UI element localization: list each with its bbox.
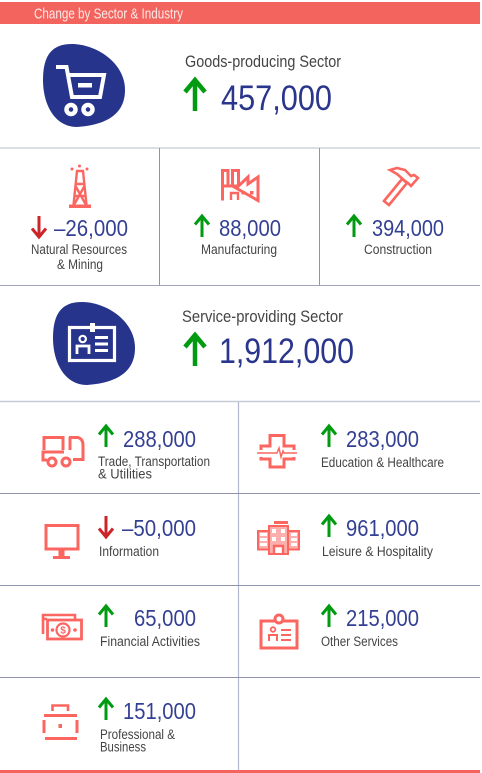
icon: briefcase: [44, 706, 77, 740]
heading: goods-producing sector: Goods-producing Sector: [185, 52, 341, 71]
icon: money: [43, 615, 82, 639]
value: 151,000: 151,000: [123, 698, 196, 724]
arrow: up: [195, 216, 209, 237]
icon: id card: [261, 615, 297, 648]
icon: money: $: [60, 626, 66, 636]
icon: shopping cart: [43, 44, 125, 127]
label: other services: Other Services: [321, 634, 398, 649]
panel: information: [46, 515, 196, 559]
label: manufacturing: Manufacturing: [201, 242, 277, 257]
arrow: up: [322, 606, 336, 627]
arrow: up: [322, 426, 336, 447]
header bar: [0, 2, 480, 24]
panel: education and healthcare: [257, 426, 444, 470]
panel: leisure and hospitality: [258, 515, 433, 559]
panel: financial activities: [43, 605, 200, 649]
arrow: down: [99, 516, 113, 537]
label: professional and business: [100, 727, 175, 754]
value: 457,000: 457,000: [221, 79, 332, 118]
icon: hammer: [384, 168, 418, 205]
panel: manufacturing: [195, 170, 281, 257]
arrow: up: [99, 426, 113, 447]
icon: monitor: [46, 526, 78, 559]
value: -26,000: –26,000: [54, 215, 128, 241]
bottom bar: [0, 770, 480, 773]
panel: other services: [261, 605, 419, 649]
value: 1,912,000: 1,912,000: [219, 332, 354, 371]
arrow: up: [185, 80, 205, 111]
arrow: up: [322, 516, 336, 537]
arrow: up: [347, 216, 361, 237]
panel: natural resources and mining: [31, 164, 128, 272]
panel: construction: [347, 168, 444, 257]
label: information: Information: [99, 544, 159, 559]
value: 88,000: 88,000: [219, 215, 281, 241]
label: trade, transportation and utilities: [98, 454, 210, 482]
panel: goods-producing sector: [43, 44, 341, 127]
label: trade, transportation and utilities: & Utilities: [98, 466, 152, 482]
value: 65,000: 65,000: [134, 605, 196, 631]
icon: factory: [222, 170, 258, 200]
arrow: down: [32, 216, 46, 237]
label: education and healthcare: Education & Healthcare: [321, 455, 444, 470]
label: natural resources and mining: [31, 242, 127, 272]
label: natural resources and mining: Natural Resources: [31, 242, 127, 257]
label: trade, transportation and utilities: Trade, Transportation: [98, 454, 210, 469]
header title: Change by Sector & Industry: [34, 6, 184, 22]
value: 288,000: 288,000: [123, 426, 196, 452]
value: 283,000: 283,000: [346, 426, 419, 452]
panel: service-providing sector: [53, 302, 354, 385]
label: professional and business: Business: [100, 740, 146, 754]
icon: oil derrick: [69, 164, 91, 208]
panel: trade, transportation and utilities: [42, 426, 210, 482]
value: 215,000: 215,000: [346, 605, 419, 631]
label: leisure and hospitality: Leisure & Hospitality: [322, 544, 433, 559]
icon: medical cross: [257, 436, 297, 467]
value: -50,000: –50,000: [122, 515, 196, 541]
label: construction: Construction: [364, 242, 432, 257]
arrow: up: [185, 335, 205, 366]
heading: service-providing sector: Service-providing Sector: [182, 307, 343, 326]
label: professional and business: Professional &: [100, 727, 175, 742]
label: natural resources and mining: & Mining: [57, 257, 103, 272]
value: 961,000: 961,000: [346, 515, 419, 541]
label: financial activities: Financial Activities: [100, 634, 200, 649]
arrow: up: [99, 699, 113, 720]
arrow: up: [99, 606, 113, 627]
panel: professional and business: [44, 698, 196, 754]
value: 394,000: 394,000: [372, 215, 444, 241]
icon: id badge: [53, 302, 135, 385]
icon: hotel building: [258, 521, 299, 554]
icon: truck: [42, 437, 83, 466]
